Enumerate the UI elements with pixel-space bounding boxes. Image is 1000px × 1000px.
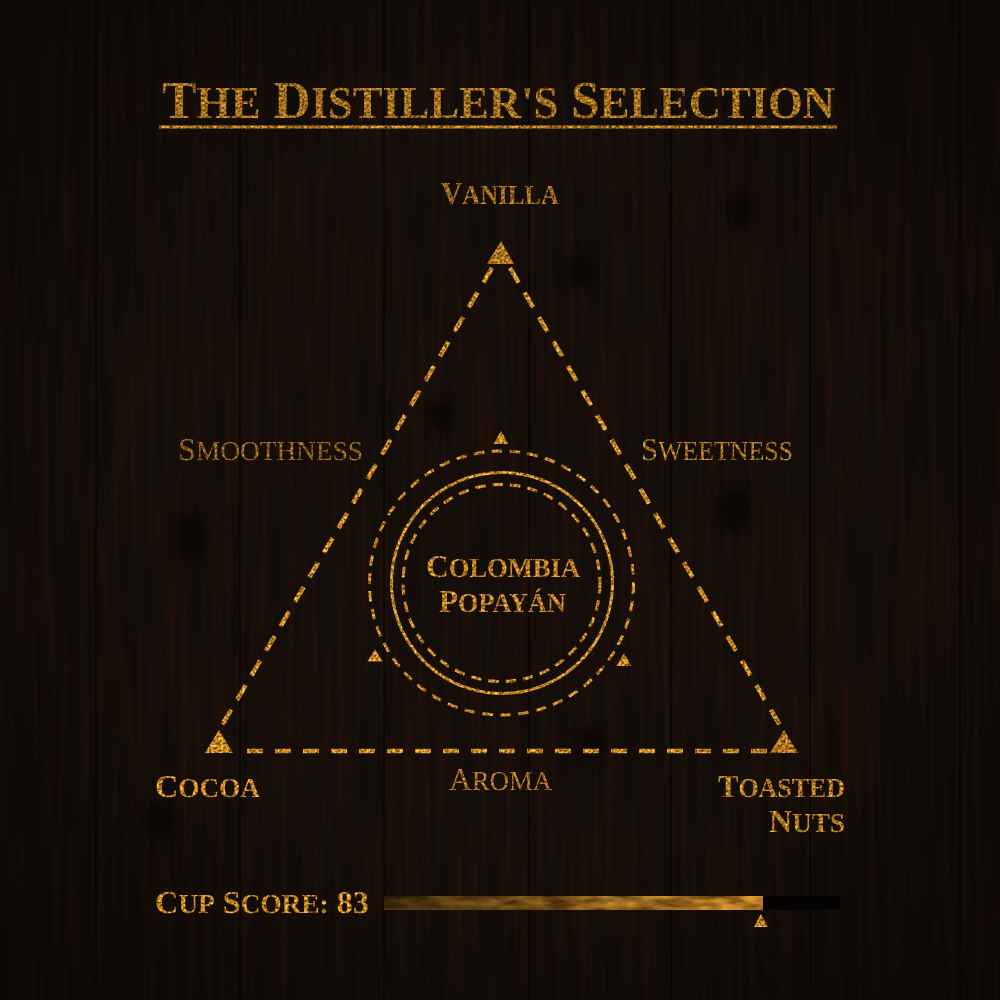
ring marker: right: [616, 653, 632, 666]
title: THE DISTILLER'S SELECTION: [162, 72, 835, 130]
badge text: Colombia Popayán: [426, 548, 580, 619]
ring marker: left: [368, 649, 382, 662]
label: Cup Score: CUP SCORE: 83: [155, 884, 369, 920]
label: Sweetness: SWEETNESS: [641, 431, 793, 467]
label: Vanilla: VANILLA: [441, 175, 559, 211]
label: Smoothness: SMOOTHNESS: [178, 431, 363, 467]
badge text: Colombia Popayán: COLOMBIA: [426, 548, 580, 584]
flavor triangle: dashed edges: [221, 268, 781, 751]
label: Cocoa: COCOA: [155, 768, 261, 804]
label: Toasted Nuts: [718, 768, 845, 839]
label: Toasted Nuts: NUTS: [769, 803, 845, 839]
ring marker: top: [494, 431, 508, 444]
vertex marker: Cocoa: [205, 730, 233, 753]
title underline: [159, 126, 837, 128]
center badge: concentric rings: [370, 451, 634, 715]
score bar track: [384, 896, 840, 910]
score bar fill: [384, 896, 763, 910]
score marker: [754, 914, 768, 927]
vertex marker: Vanilla: [487, 241, 514, 264]
label: Aroma: AROMA: [449, 761, 552, 797]
label: Toasted Nuts: TOASTED: [718, 768, 845, 804]
vertex marker: Toasted Nuts: [770, 730, 798, 753]
badge text: Colombia Popayán: POPAYÁN: [439, 583, 566, 619]
